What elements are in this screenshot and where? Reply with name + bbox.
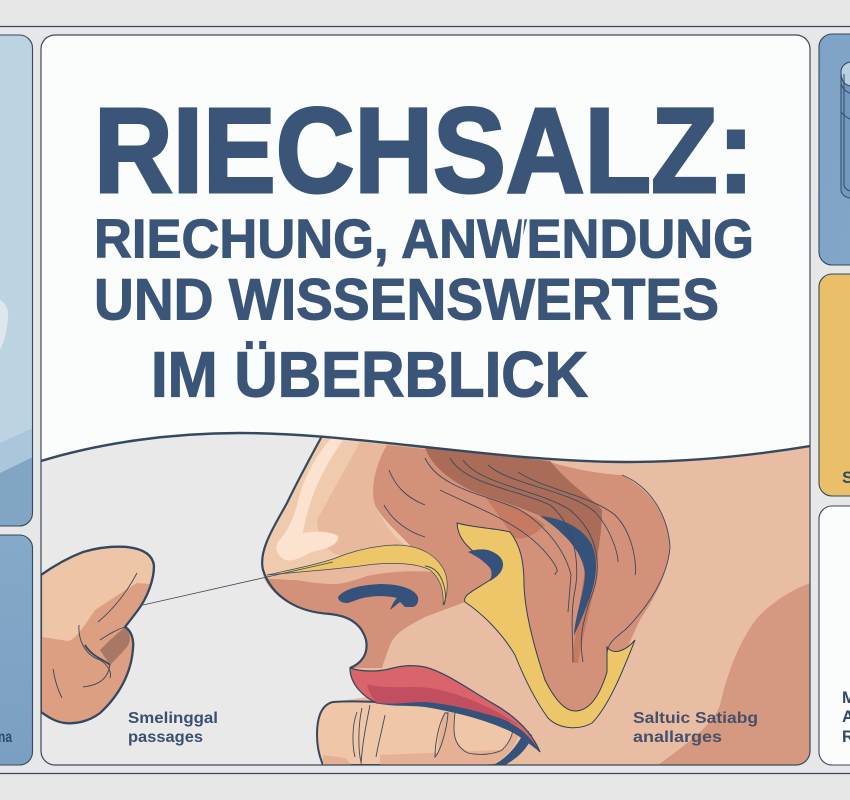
title line 1: RIECHSALZ: xyxy=(94,82,754,218)
ruddy fold xyxy=(485,497,598,663)
upper lip light area xyxy=(424,618,425,619)
light band under the yellow passage xyxy=(268,566,432,584)
illustration: nose anatomy xyxy=(41,433,810,765)
panel: left top blue xyxy=(0,35,33,530)
nostril xyxy=(338,584,418,610)
nose tone band xyxy=(317,442,410,555)
fold lines xyxy=(353,458,670,765)
lower background xyxy=(42,434,366,764)
panel: right top blue with cylinder xyxy=(819,34,850,265)
lower right shape xyxy=(658,583,810,765)
lip xyxy=(350,666,540,752)
panel: left lower blue xyxy=(0,535,32,765)
label: right annotation: Saltuic Satiabg xyxy=(633,710,758,727)
nose and face outline xyxy=(262,436,367,668)
hand shading xyxy=(42,583,150,723)
nose highlight xyxy=(276,438,343,561)
hand lines xyxy=(41,547,154,723)
title line 2: RIECHUNG, ANWENDUNG xyxy=(94,208,754,270)
title line 4: IM ÜBERBLICK xyxy=(151,338,588,410)
brown fold xyxy=(426,448,602,610)
panel: right lower white xyxy=(819,506,850,765)
yellow passage xyxy=(457,523,635,728)
wave boundary line xyxy=(41,433,810,462)
hand or fist xyxy=(41,547,154,723)
hand shadow fold xyxy=(100,627,130,665)
hairline glitch in title xyxy=(520,216,524,262)
pointer line xyxy=(143,562,333,605)
lip dark edge xyxy=(377,702,540,752)
face skin xyxy=(262,436,810,765)
nose mid tone xyxy=(264,438,410,576)
navy fold xyxy=(540,516,596,636)
icon: salt jar cylinder xyxy=(841,62,850,198)
finger shading xyxy=(323,712,520,765)
upper nostril navy xyxy=(468,549,503,581)
title line 3: UND WISSENSWERTES xyxy=(94,268,719,332)
yellow nostril band xyxy=(267,545,447,605)
label: left annotation: Smelinggal xyxy=(128,710,218,727)
label: right annotation: anallarges xyxy=(633,729,722,746)
finger xyxy=(317,701,528,765)
dark skin side of the nose xyxy=(264,445,670,726)
panel: right middle yellow xyxy=(819,274,850,496)
label: left annotation: passages xyxy=(128,729,203,746)
dark band under lip xyxy=(487,733,532,764)
lower lip shade xyxy=(367,684,520,726)
